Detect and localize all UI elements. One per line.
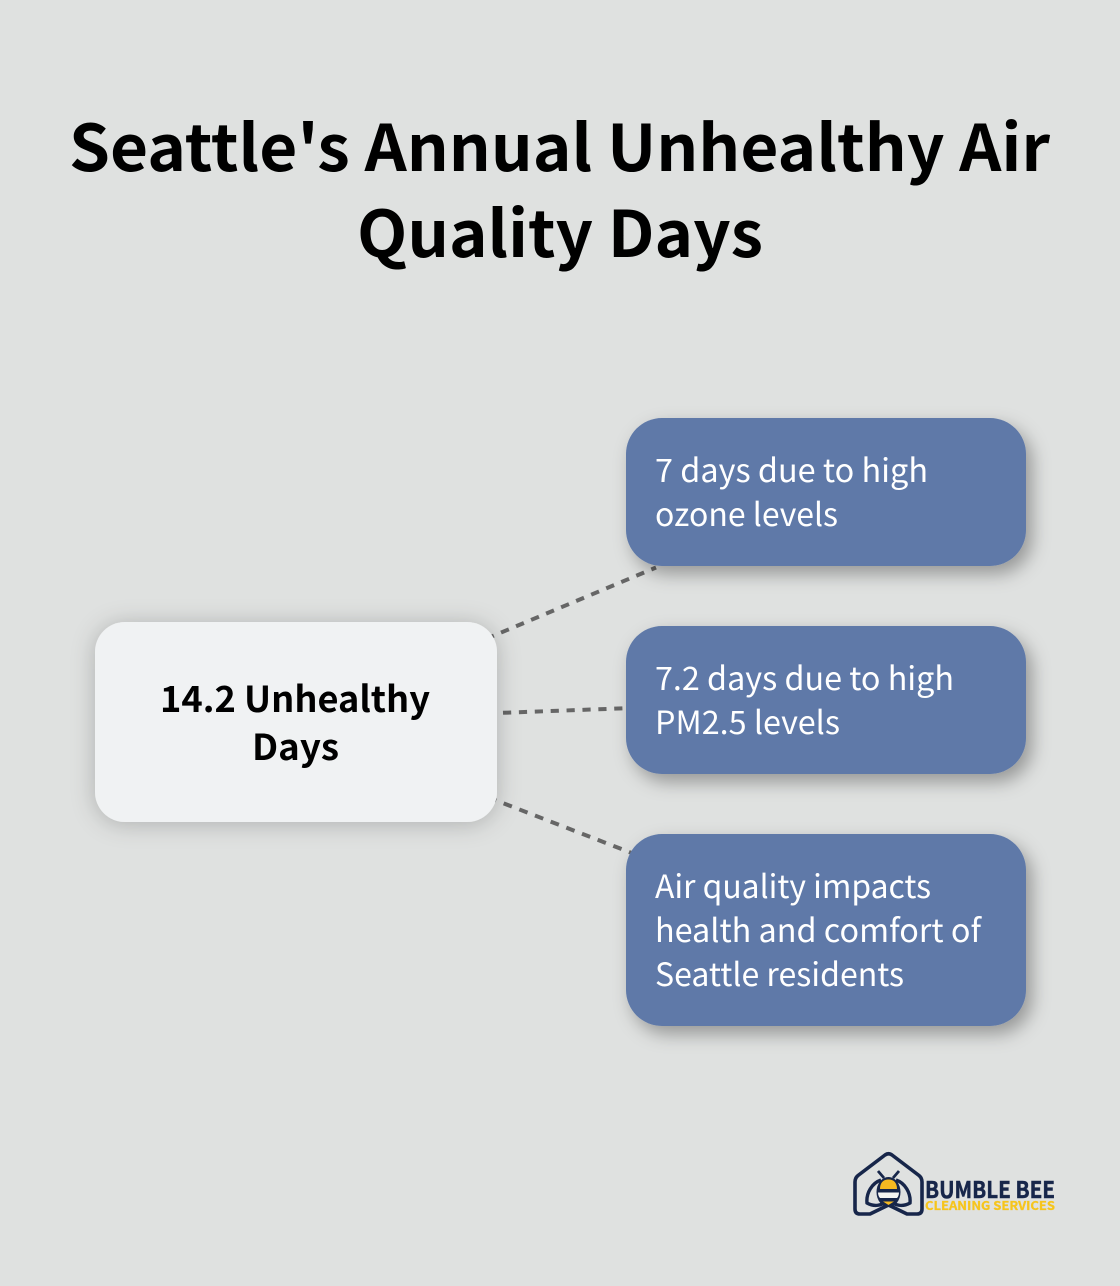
panel: ozone bbox=[626, 418, 1026, 566]
title bbox=[69, 98, 1050, 276]
health impact text: Air quality impacts bbox=[655, 862, 931, 908]
connector: centre to health box bbox=[488, 797, 633, 854]
ozone text: 7 days due to high bbox=[655, 446, 928, 492]
panel: health impact bbox=[626, 834, 1026, 1026]
health impact text: health and comfort of bbox=[655, 906, 983, 952]
logo: Bumble Bee Cleaning Services bbox=[855, 1154, 1055, 1214]
connector: centre to ozone box bbox=[486, 568, 656, 639]
health impact text: Seattle residents bbox=[655, 950, 904, 996]
panel heading: Days bbox=[252, 719, 339, 771]
panel: 14.2 unhealthy days bbox=[95, 622, 497, 822]
panel: PM2.5 bbox=[626, 626, 1026, 774]
title: Quality Days bbox=[357, 184, 763, 276]
logo tagline: CLEANING SERVICES bbox=[925, 1197, 1055, 1214]
PM2.5 text: 7.2 days due to high bbox=[655, 654, 954, 700]
connector: centre to PM2.5 box bbox=[503, 708, 624, 713]
logo wordmark: BUMBLE BEE bbox=[925, 1171, 1055, 1205]
panel heading bbox=[160, 671, 430, 771]
PM2.5 text: PM2.5 levels bbox=[655, 698, 840, 744]
health impact text bbox=[655, 862, 983, 996]
panel heading: 14.2 Unhealthy bbox=[160, 671, 430, 723]
icon: bee in house bbox=[855, 1154, 922, 1214]
PM2.5 text bbox=[655, 654, 954, 744]
title: Seattle's Annual Unhealthy Air bbox=[69, 98, 1050, 190]
ozone text bbox=[655, 446, 928, 536]
ozone text: ozone levels bbox=[655, 490, 838, 536]
